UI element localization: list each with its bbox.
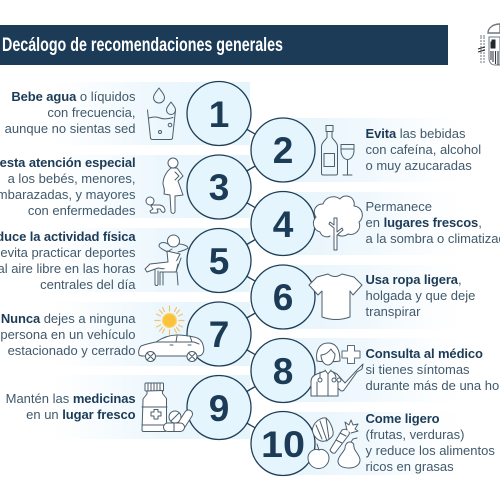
circle: 10: 10 xyxy=(261,424,305,465)
circle: 2 xyxy=(251,118,315,182)
circle: 9 xyxy=(187,376,251,440)
text: evita: Evita las bebidas xyxy=(366,126,466,141)
circle: 7: 7 xyxy=(209,314,229,355)
circle: 10 xyxy=(251,412,315,476)
text: permanece 2: en lugares frescos, xyxy=(366,215,482,230)
circle: 4 xyxy=(251,192,315,256)
circle: 4: 4 xyxy=(273,204,294,245)
icon: fruit and vegetables xyxy=(308,418,360,468)
circle: 6 xyxy=(251,265,315,329)
text: atención 2: a los bebés, menores, xyxy=(8,171,136,186)
circle: 7 xyxy=(187,302,251,366)
text: medicinas: Mantén las medicinas xyxy=(6,391,136,406)
text: bebe agua 2: con frecuencia, xyxy=(47,105,136,120)
circle: 5: 5 xyxy=(209,241,229,282)
icon: pregnant woman and baby xyxy=(146,158,183,214)
circle: 8: 8 xyxy=(273,351,293,392)
icon: bottle and wine glass xyxy=(322,126,354,175)
circle: 3: 3 xyxy=(209,167,229,208)
text: come 2: (frutas, verduras) xyxy=(366,427,464,442)
icon: car xyxy=(139,335,204,362)
icon: person on chair xyxy=(145,235,188,286)
icon: medicine bottle and pills xyxy=(142,383,193,432)
header bar xyxy=(0,25,448,65)
icon: t-shirt xyxy=(309,274,362,320)
circle: 1: 1 xyxy=(209,94,229,135)
text: atención 4: con enfermedades xyxy=(28,203,136,218)
icon: doctor xyxy=(311,343,363,396)
text: actividad 4: centrales del día xyxy=(40,277,136,292)
icon: tree xyxy=(313,196,362,250)
text: permanece: Permanece xyxy=(366,199,432,214)
text: medicinas 2: en un lugar fresco xyxy=(26,407,136,422)
text: come ligero: Come ligero xyxy=(366,411,440,426)
text: actividad 3: al aire libre en las horas xyxy=(0,261,136,276)
icon: sun xyxy=(155,306,184,335)
circle: 6: 6 xyxy=(273,277,293,318)
text: come 4: ricos en grasas xyxy=(366,459,454,474)
text: consulta: Consulta al médico xyxy=(366,346,483,361)
background bands xyxy=(50,82,463,475)
text: ropa: Usa ropa ligera, xyxy=(366,272,462,287)
circle: 5 xyxy=(187,228,251,292)
text: bebe agua 3: aunque no sientas sed xyxy=(5,121,136,136)
circle: 1 xyxy=(187,82,251,146)
text: consulta 2: si tienes síntomas xyxy=(366,362,470,377)
title: Decálogo de recomendaciones generales xyxy=(2,35,283,56)
icon: coat of arms xyxy=(478,24,500,65)
text: come 3: y reduce los alimentos xyxy=(366,443,495,458)
circle: 9: 9 xyxy=(209,388,229,429)
connector chain xyxy=(219,114,283,444)
text: ropa 3: transpirar xyxy=(366,304,421,319)
text: evita 3: o muy azucaradas xyxy=(366,158,472,173)
text: nunca: Nunca dejes a ninguna xyxy=(1,311,136,326)
circle: 2: 2 xyxy=(273,130,293,171)
text: nunca 3: estacionado y cerrado xyxy=(8,343,136,358)
text: evita 2: con cafeína, alcohol xyxy=(366,142,481,157)
text: ropa 2: holgada y que deje xyxy=(366,288,475,303)
text: bebe agua: Bebe agua o líquidos xyxy=(11,89,136,104)
icon: water glass xyxy=(148,88,176,140)
circle: 3 xyxy=(187,155,251,219)
text: nunca 2: persona en un vehículo xyxy=(0,327,136,342)
circle: 8 xyxy=(251,338,315,402)
